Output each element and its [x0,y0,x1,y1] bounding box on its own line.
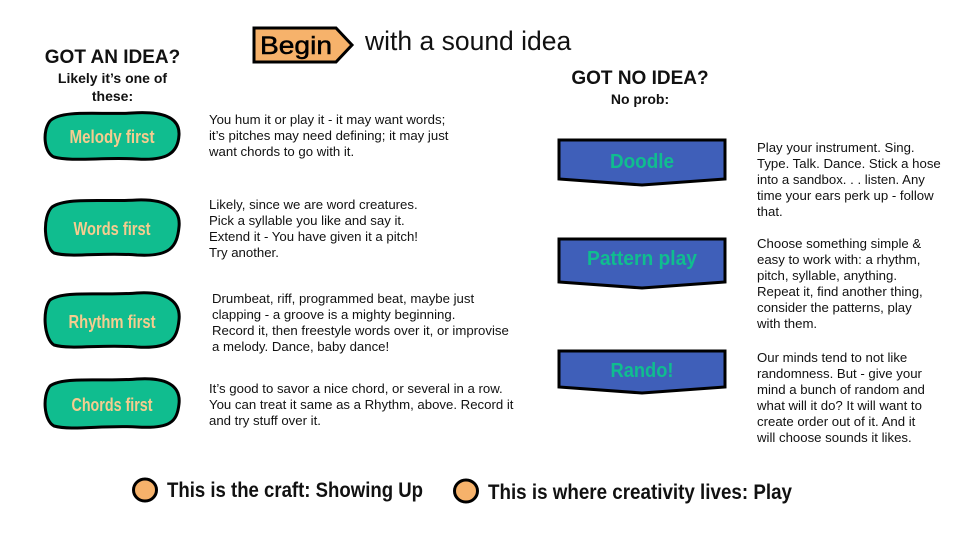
text: rando: mind a bunch of random and [757,382,925,397]
text: rhythm: Record it, then freestyle words over it, or improvise [212,323,509,338]
text: pattern play [757,236,923,331]
text: rando: Our minds tend to not like [757,350,907,365]
text: rando: create order out of it. And it [757,414,915,429]
text: chords: It’s good to savor a nice chord, or several in a row. [209,381,503,396]
blob: chords first: Chords first [72,395,152,415]
banner: pattern play: Pattern play [587,248,698,270]
text: pattern play: easy to work with: a rhythm, [757,252,920,267]
text: words: Pick a syllable you like and say it. [209,213,405,228]
text: chords [209,381,514,428]
text: doodle: Play your instrument. Sing. [757,140,915,155]
text: doodle: into a sandbox. . . listen. Any [757,172,925,187]
text: rhythm: a melody. Dance, baby dance! [212,339,389,354]
heading: got no idea: No prob: [611,91,669,107]
banner: pattern play [558,238,726,290]
heading: got an idea: these: [92,88,133,104]
text: rhythm: clapping - a groove is a mighty beginning. [212,307,455,322]
text: words: Likely, since we are word creatures. [209,197,418,212]
blob: words first [44,198,181,257]
banner: doodle [558,138,726,186]
text: pattern play: pitch, syllable, anything. [757,268,897,283]
blob: melody first: Melody first [70,127,155,147]
text: rando: randomness. But - give your [757,366,922,381]
text: rando [757,350,925,445]
heading: got an idea: Likely it’s one of [58,70,167,86]
banner: rando: Rando! [610,360,674,382]
banner: rando [558,350,726,394]
text: doodle [757,140,941,219]
text: pattern play: Choose something simple & [757,236,921,251]
blob: rhythm first [44,291,181,349]
heading: got no idea: GOT NO IDEA? [571,68,709,89]
heading: got an idea: GOT AN IDEA? [45,47,180,68]
text: pattern play: consider the patterns, play [757,300,912,315]
begin tag [252,26,354,64]
text: doodle: that. [757,204,783,219]
text: melody [209,112,448,159]
banner: doodle: Doodle [610,151,674,173]
text: words: Extend it - You have given it a pitch! [209,229,418,244]
text: rando: will choose sounds it likes. [757,430,912,445]
text: rhythm: Drumbeat, riff, programmed beat, maybe just [212,291,474,306]
begin tag: Begin [260,32,332,60]
text: melody: it’s pitches may need defining; it may just [209,128,448,143]
text: doodle: time your ears perk up - follow [757,188,934,203]
blob: words first: Words first [74,219,150,239]
blob: melody first [44,111,181,161]
text: chords: and try stuff over it. [209,413,321,428]
blob: rhythm first: Rhythm first [68,312,156,332]
heading: got an idea [45,47,180,104]
text: doodle: Type. Talk. Dance. Stick a hose [757,156,941,171]
text: melody: You hum it or play it - it may want words; [209,112,445,127]
text: pattern play: Repeat it, find another thing, [757,284,923,299]
blob: chords first [44,377,181,430]
text: rhythm [212,291,509,354]
text: chords: You can treat it same as a Rhythm, above. Record it [209,397,513,412]
text: words [209,197,418,260]
text: rando: what will it do? It will want to [757,398,922,413]
text: melody: want chords to go with it. [209,144,354,159]
text: words: Try another. [209,245,279,260]
text: pattern play: with them. [757,316,817,331]
title: with a sound idea [365,26,571,56]
heading: got no idea [571,68,709,107]
